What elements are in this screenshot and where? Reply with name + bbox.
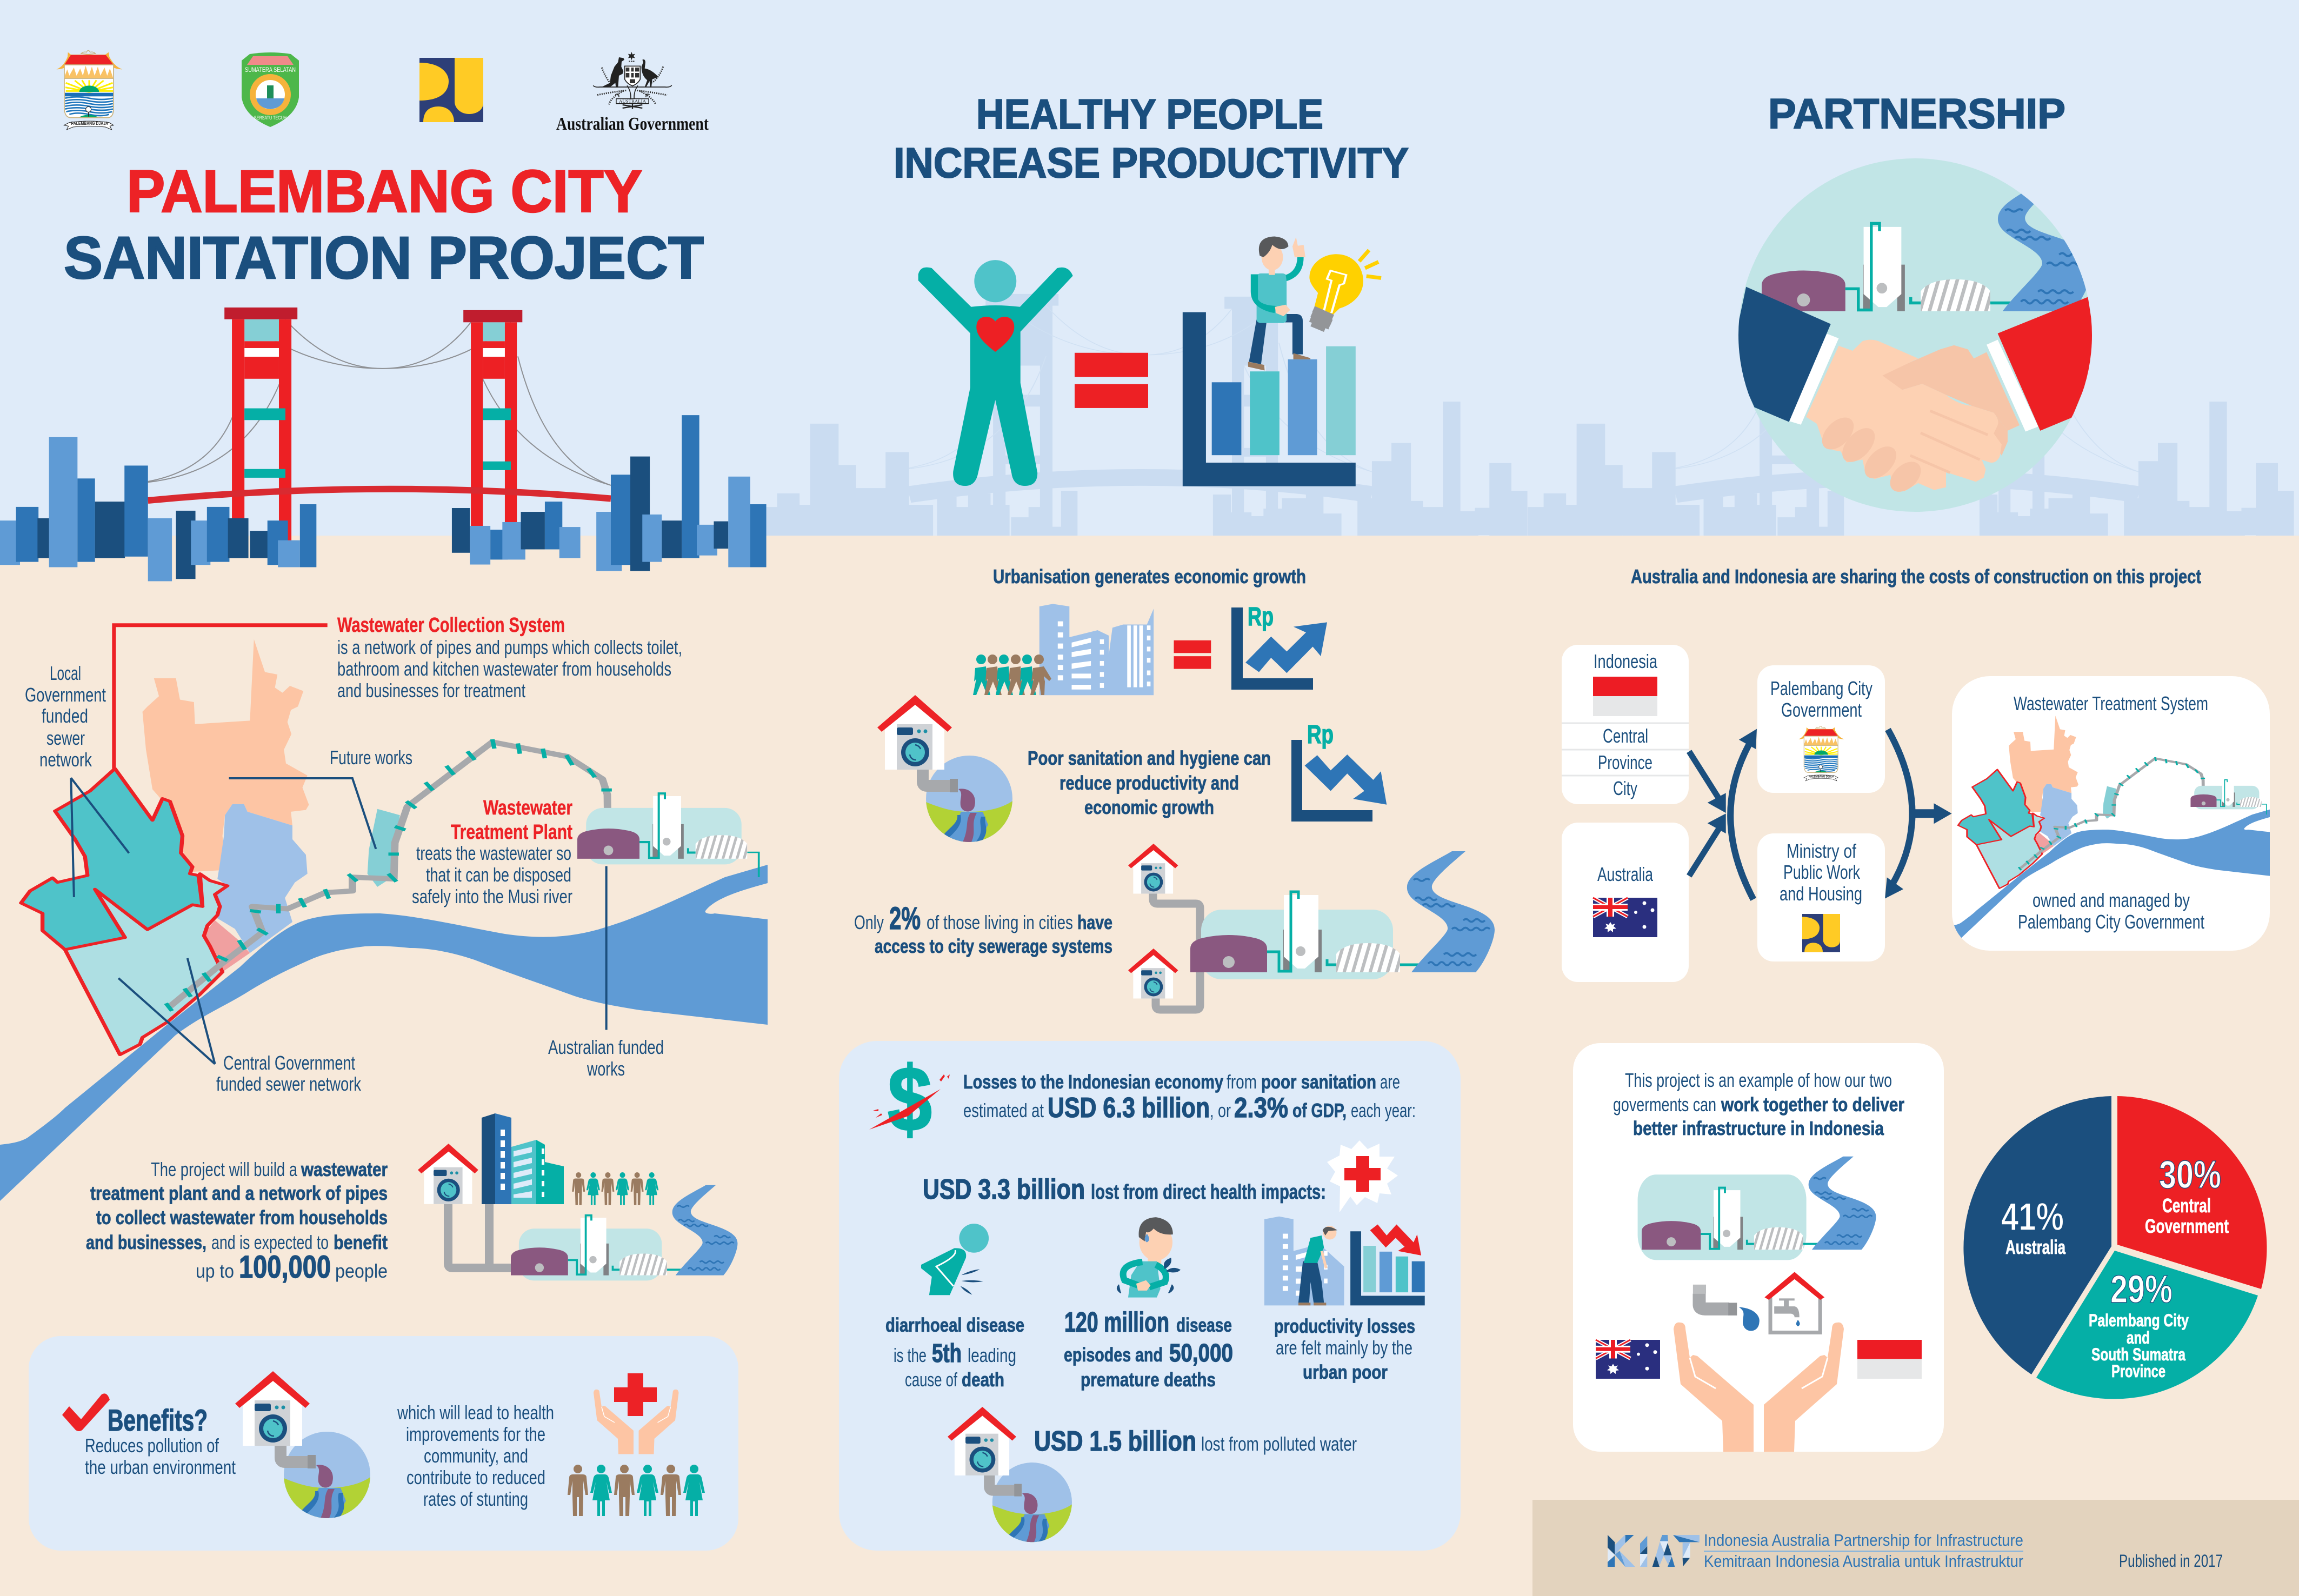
text: health improvements: rates of stunting bbox=[423, 1488, 528, 1510]
illustration: houses connected to plant and river bbox=[1128, 844, 1495, 1010]
chart: rupiah growth: Rp bbox=[1248, 603, 1274, 631]
label: Australian funded works: Australian funded bbox=[548, 1036, 664, 1058]
slice: Palembang City and South Sumatra Province 29% bbox=[2036, 1251, 2258, 1399]
text: published: Published in 2017 bbox=[2119, 1551, 2223, 1571]
text: two governments bbox=[1613, 1069, 1904, 1139]
text: diarrhoeal disease: is the bbox=[894, 1344, 927, 1366]
icon: buildings bbox=[1039, 604, 1154, 695]
arrows: funding flow bbox=[1689, 729, 1952, 899]
text: reduces pollution: the urban environment bbox=[85, 1456, 236, 1478]
text: only 2 percent: Only bbox=[854, 911, 884, 933]
icon: open hands bbox=[1674, 1323, 1844, 1452]
text: losses summary: 2.3% bbox=[1234, 1092, 1288, 1124]
text: partnership name bbox=[1704, 1531, 2023, 1571]
label: local government funded bbox=[25, 662, 106, 771]
heading: healthy people: HEALTHY PEOPLE bbox=[976, 90, 1323, 138]
text: wastewater collection system: is a network of pipes and pumps which collects toilet, bbox=[337, 636, 682, 658]
panel: Indonesia funders: City bbox=[1613, 777, 1637, 799]
text: losses summary: are bbox=[1380, 1071, 1400, 1093]
equals sign small bbox=[1174, 640, 1211, 669]
text: diarrhoeal disease: cause of bbox=[905, 1368, 958, 1391]
label: local government funded: network bbox=[39, 749, 92, 771]
text: partnership name: Kemitraan Indonesia Australia untuk Infrastruktur bbox=[1704, 1552, 2023, 1571]
label: future works: Future works bbox=[330, 746, 412, 769]
slice: Australia 41% bbox=[1963, 1096, 2111, 1374]
text: polluted water: USD 1.5 billion bbox=[1034, 1426, 1196, 1457]
text: project summary: and is expected to bbox=[211, 1231, 329, 1253]
logo: South Sumatra: SUMATERA SELATAN bbox=[245, 66, 296, 74]
text: direct health impacts bbox=[923, 1174, 1326, 1205]
label: central government funded: funded sewer network bbox=[216, 1073, 362, 1095]
icon: red check mark bbox=[62, 1393, 110, 1431]
text: diarrhoeal disease: 5th bbox=[932, 1339, 962, 1368]
text: direct health impacts: lost from direct health impacts: bbox=[1091, 1181, 1326, 1204]
panel: Ministry of Public Work and Housing: and Housing bbox=[1780, 883, 1862, 905]
icon: sick person bbox=[1117, 1217, 1180, 1298]
icon: flag of Indonesia bbox=[1857, 1340, 1922, 1379]
icon: dollar sign with slash: $ bbox=[888, 1048, 932, 1151]
text: wastewater treatment plant: that it can be disposed bbox=[426, 864, 571, 886]
slice: Palembang City and South Sumatra Province 29%: Province bbox=[2111, 1361, 2165, 1381]
text: diarrhoeal disease: diarrhoeal disease bbox=[885, 1314, 1024, 1336]
panel: wastewater treatment system: Wastewater Treatment System bbox=[2014, 692, 2208, 714]
panel: Australia funder bbox=[1562, 823, 1689, 982]
text: two governments: work together to deliver bbox=[1721, 1093, 1904, 1116]
text: losses summary: each year: bbox=[1351, 1099, 1416, 1121]
panel: Ministry of Public Work and Housing bbox=[1757, 833, 1885, 961]
text: disease episodes: episodes and bbox=[1064, 1344, 1163, 1366]
icon: house polluting river bbox=[948, 1407, 1072, 1544]
chart: rupiah decline: Rp bbox=[1307, 720, 1334, 749]
text: direct health impacts: USD 3.3 billion bbox=[923, 1174, 1085, 1205]
icon: dollar sign with slash bbox=[869, 1048, 950, 1151]
chart: rupiah growth bbox=[1231, 603, 1327, 690]
text: poor sanitation: Poor sanitation and hygiene can bbox=[1028, 747, 1271, 769]
slice: Palembang City and South Sumatra Province 29%: and bbox=[2127, 1328, 2150, 1347]
text: project summary: wastewater bbox=[301, 1158, 388, 1180]
slice: Central Government 30%: Government bbox=[2145, 1215, 2229, 1237]
text: health improvements: improvements for the bbox=[406, 1423, 545, 1445]
label: Australian funded works: works bbox=[587, 1058, 625, 1080]
label: central government funded: Central Government bbox=[223, 1052, 355, 1074]
logo: Australian Government bbox=[556, 52, 709, 134]
text: disease episodes bbox=[1064, 1307, 1233, 1391]
text: project summary: treatment plant and a network of pipes bbox=[90, 1182, 388, 1204]
background: sky bbox=[0, 0, 2299, 536]
slice: Palembang City and South Sumatra Province 29%: Palembang City bbox=[2089, 1311, 2189, 1330]
text: wastewater collection system: Wastewater Collection System bbox=[337, 614, 565, 637]
text: polluted water: lost from polluted water bbox=[1201, 1433, 1357, 1455]
slice: Palembang City and South Sumatra Province 29%: 29% bbox=[2110, 1268, 2173, 1311]
text: project summary: to collect wastewater from households bbox=[96, 1206, 388, 1228]
panel: Indonesia funders: Province bbox=[1598, 751, 1652, 773]
faded skyline background bbox=[767, 294, 2294, 536]
panel: economic losses bbox=[839, 1041, 1461, 1551]
text: project summary: The project will build a bbox=[151, 1158, 298, 1180]
panel: Ministry of Public Work and Housing: Public Work bbox=[1783, 861, 1861, 883]
text: wastewater collection system bbox=[337, 614, 682, 702]
text: productivity losses bbox=[1274, 1315, 1415, 1383]
label: Australian funded works bbox=[548, 1036, 664, 1080]
chart: rupiah decline bbox=[1291, 720, 1387, 822]
text: productivity losses: productivity losses bbox=[1274, 1315, 1415, 1337]
slice: Palembang City and South Sumatra Province 29%: South Sumatra bbox=[2091, 1345, 2185, 1364]
logo: Palembang City bbox=[56, 50, 123, 130]
text: partnership name: Indonesia Australia Partnership for Infrastructure bbox=[1704, 1531, 2023, 1550]
text: productivity losses: urban poor bbox=[1303, 1361, 1388, 1383]
icon: pipe, tap and house bbox=[1693, 1272, 1824, 1332]
label: local government funded: sewer bbox=[46, 727, 85, 749]
bridge bbox=[148, 308, 611, 547]
text: wastewater treatment plant: safely into the Musi river bbox=[412, 885, 572, 907]
text: wastewater treatment plant bbox=[412, 797, 572, 907]
panel: Indonesia funders: Indonesia bbox=[1594, 650, 1658, 672]
icon: walking people bbox=[973, 655, 1051, 695]
text: losses summary: , or bbox=[1210, 1099, 1231, 1121]
heading: partnership: PARTNERSHIP bbox=[1768, 90, 2065, 137]
logo: Australian Government: Australian Government bbox=[556, 114, 709, 134]
panel: working together bbox=[1573, 1043, 1944, 1452]
text: polluted water bbox=[1034, 1426, 1357, 1457]
text: disease episodes: premature deaths bbox=[1081, 1368, 1216, 1391]
text: reduces pollution bbox=[85, 1434, 236, 1478]
text: poor sanitation: economic growth bbox=[1084, 796, 1214, 818]
text: health improvements: contribute to reduced bbox=[407, 1466, 545, 1488]
small map bbox=[1949, 716, 2270, 949]
text: losses summary: of GDP, bbox=[1292, 1099, 1347, 1121]
text: project summary: 100,000 bbox=[239, 1250, 331, 1285]
panel: Palembang City Government: Government bbox=[1781, 699, 1862, 721]
panel: Indonesia funders: Central bbox=[1603, 725, 1648, 747]
text: only 2 percent bbox=[854, 901, 1112, 957]
text: disease episodes: 50,000 bbox=[1169, 1339, 1233, 1367]
text: only 2 percent: of those living in cities bbox=[927, 911, 1073, 933]
text: urbanisation: Urbanisation generates economic growth bbox=[993, 565, 1306, 587]
label: local government funded: Government bbox=[25, 684, 106, 706]
text: losses summary: estimated at bbox=[963, 1099, 1044, 1121]
text: wastewater treatment plant: Treatment Plant bbox=[451, 821, 572, 844]
bar chart with man and light bulb bbox=[1183, 237, 1381, 486]
text: disease episodes: disease bbox=[1176, 1314, 1232, 1336]
background: sand bbox=[0, 536, 2299, 1596]
slice: Central Government 30%: 30% bbox=[2159, 1153, 2221, 1197]
title bbox=[64, 158, 704, 291]
icon: productivity losses bbox=[1264, 1217, 1425, 1305]
label: local government funded: Local bbox=[50, 662, 81, 684]
text: diarrhoeal disease: death bbox=[962, 1368, 1004, 1391]
text: disease episodes: 120 million bbox=[1064, 1307, 1169, 1338]
label: central government funded bbox=[216, 1052, 362, 1095]
illustration: plant and river bbox=[1638, 1157, 1876, 1260]
text: owned and managed: owned and managed by bbox=[2033, 889, 2190, 911]
slice: Australia 41%: 41% bbox=[2001, 1196, 2064, 1239]
text: productivity losses: are felt mainly by the bbox=[1276, 1337, 1412, 1359]
leader lines bbox=[71, 625, 607, 1064]
text: two governments: better infrastructure in Indonesia bbox=[1633, 1117, 1884, 1139]
panel: Ministry of Public Work and Housing: Ministry of bbox=[1787, 840, 1857, 862]
text: project summary: benefit bbox=[334, 1231, 388, 1253]
title: SANITATION PROJECT bbox=[64, 225, 704, 291]
text: diarrhoeal disease: leading bbox=[968, 1344, 1016, 1366]
heading: healthy people: INCREASE PRODUCTIVITY bbox=[894, 139, 1409, 186]
label: local government funded: funded bbox=[42, 705, 88, 727]
icon: house polluting river bbox=[877, 695, 1012, 844]
slice: Central Government 30%: Central bbox=[2162, 1194, 2211, 1217]
icon: vomiting person bbox=[921, 1224, 989, 1295]
text: poor sanitation: reduce productivity and bbox=[1059, 772, 1239, 794]
icon: burst with red cross bbox=[1327, 1140, 1398, 1212]
text: wastewater treatment plant: Wastewater bbox=[483, 797, 572, 819]
text: project summary bbox=[86, 1158, 388, 1285]
logo: Ministry of Public Works bbox=[419, 58, 483, 122]
text: owned and managed: Palembang City Government bbox=[2018, 911, 2204, 933]
light bulb bbox=[1309, 250, 1381, 329]
text: wastewater collection system: bathroom and kitchen wastewater from households bbox=[337, 658, 671, 680]
text: losses summary: USD 6.3 billion bbox=[1048, 1092, 1210, 1124]
illustration: handshake in circle bbox=[1731, 158, 2097, 512]
panel: wastewater treatment system bbox=[1949, 676, 2270, 951]
text: losses summary: Losses to the Indonesian economy bbox=[963, 1071, 1223, 1093]
slice: Australia 41%: Australia bbox=[2005, 1236, 2066, 1258]
footer band bbox=[1532, 1500, 2299, 1596]
icon: community people bbox=[568, 1465, 705, 1516]
text: poor sanitation bbox=[1028, 747, 1271, 818]
text: two governments: goverments can bbox=[1613, 1093, 1716, 1116]
city skyline bbox=[0, 415, 767, 581]
icon: hands holding red cross bbox=[594, 1373, 679, 1454]
text: project summary: people bbox=[335, 1260, 388, 1282]
text: health improvements bbox=[397, 1401, 554, 1510]
equals sign bbox=[1075, 353, 1148, 408]
text: diarrhoeal disease bbox=[885, 1314, 1024, 1391]
text: wastewater treatment plant: treats the wastewater so bbox=[416, 842, 571, 864]
pie chart: cost shares bbox=[1963, 1096, 2267, 1399]
title: PALEMBANG CITY bbox=[126, 158, 642, 225]
text: losses summary bbox=[963, 1071, 1416, 1124]
panel: Palembang City Government bbox=[1757, 665, 1885, 793]
text: owned and managed bbox=[2018, 889, 2204, 933]
text: reduces pollution: Reduces pollution of bbox=[85, 1434, 219, 1457]
icon: healthy person with heart bbox=[918, 260, 1073, 486]
icon: house polluting river bbox=[235, 1371, 370, 1520]
logo: KIAT: KIAT bbox=[1608, 1526, 1697, 1574]
text: health improvements: community, and bbox=[424, 1445, 528, 1467]
text: only 2 percent: 2% bbox=[889, 901, 921, 936]
text: project summary: up to bbox=[196, 1260, 234, 1282]
heading: benefits: Benefits? bbox=[108, 1403, 208, 1437]
logo: South Sumatra bbox=[242, 52, 299, 127]
panel: Palembang City Government: Palembang City bbox=[1770, 677, 1872, 699]
illustration: city connected to plant bbox=[418, 1113, 737, 1280]
logo: Australian Government: AUSTRALIA bbox=[619, 99, 646, 104]
panel: benefits bbox=[29, 1336, 738, 1551]
text: project summary: and businesses, bbox=[86, 1231, 206, 1253]
text: health improvements: which will lead to health bbox=[397, 1401, 554, 1424]
map: sewer network and river bbox=[0, 639, 768, 1201]
heading: healthy people bbox=[894, 90, 1409, 186]
icon: flag of Australia bbox=[1596, 1340, 1660, 1379]
text: only 2 percent: access to city sewerage systems bbox=[875, 935, 1112, 957]
text: wastewater collection system: and businesses for treatment bbox=[337, 679, 525, 702]
man on chart bbox=[1248, 237, 1310, 370]
panel: Australia funder: Australia bbox=[1597, 863, 1654, 885]
slice: Central Government 30% bbox=[2117, 1096, 2267, 1289]
text: losses summary: from bbox=[1227, 1071, 1257, 1093]
text: only 2 percent: have bbox=[1077, 911, 1112, 933]
panel: Indonesia funders bbox=[1562, 645, 1689, 804]
text: losses summary: poor sanitation bbox=[1261, 1071, 1376, 1093]
logo: South Sumatra: BERSATU TEGUH bbox=[254, 115, 286, 121]
text: two governments: This project is an example of how our two bbox=[1625, 1069, 1892, 1091]
